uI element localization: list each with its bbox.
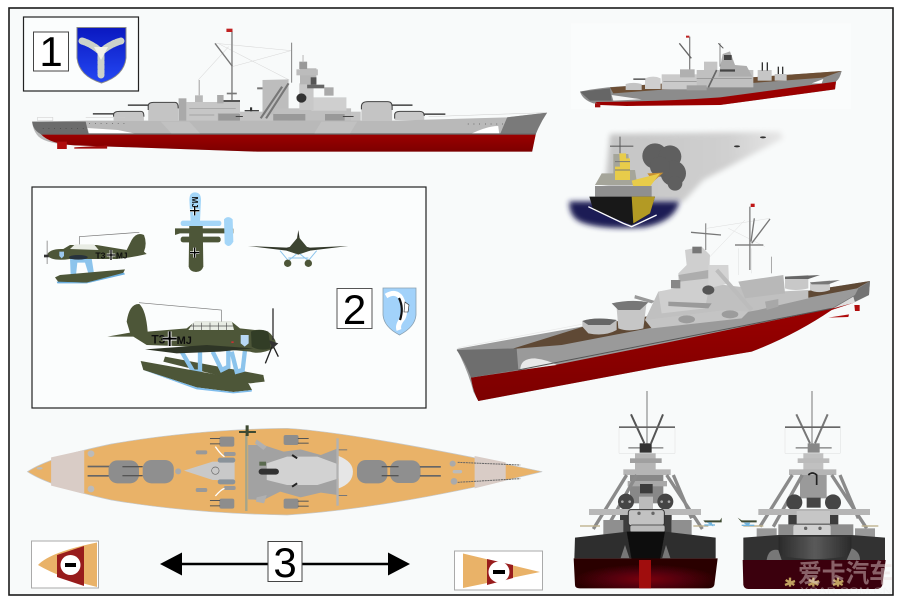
masts and flag (691, 204, 772, 273)
hull above water (743, 535, 885, 560)
watermark: 爱卡汽车 (798, 560, 893, 588)
icon: small aircraft beside front view (703, 518, 722, 527)
bridge tower (623, 453, 671, 510)
aircraft top view (175, 192, 233, 272)
superstructure and turrets (626, 51, 787, 90)
anchor gear (450, 461, 520, 485)
aircraft large three-quarter view: MJ (177, 335, 192, 347)
rear turret (757, 511, 875, 539)
deck planking (27, 428, 542, 515)
rigging (707, 218, 770, 275)
masts (679, 36, 723, 72)
hull below water (743, 560, 886, 589)
superstructure (645, 247, 840, 328)
number 3: 3 (273, 539, 297, 586)
gun smoke cloud (642, 143, 686, 191)
main superstructure (248, 435, 353, 509)
aircraft top view: MJ (190, 197, 199, 208)
panel: bow-on front view (574, 391, 718, 588)
bridge tower (789, 453, 836, 508)
splayed supports (760, 475, 867, 528)
panel: perspective view of ship, top right (571, 23, 851, 109)
funnel and catapult crane (245, 43, 292, 118)
panel: side elevation of battleship (32, 29, 547, 152)
number 1: 1 (39, 28, 63, 75)
panel: large perspective view of ship (457, 204, 870, 401)
smoke trail (603, 132, 783, 202)
number 2: 2 (343, 286, 366, 333)
hull (580, 71, 842, 107)
side guns (743, 494, 878, 527)
panel: stern marking inset (32, 541, 98, 588)
forward main turrets (357, 460, 441, 483)
main gun turrets (93, 102, 445, 121)
main mast and flag (215, 29, 240, 105)
forward turrets (582, 295, 655, 334)
hull above water (574, 532, 716, 560)
watermark: XCAR.COM.CN (800, 586, 892, 596)
illustration: ship firing guns at aircraft (569, 132, 783, 228)
secondary turrets (219, 114, 354, 121)
firing ship (588, 137, 660, 227)
number 2 (337, 286, 372, 333)
aircraft side view small: MJ (116, 250, 128, 260)
forward turret front (580, 510, 708, 537)
aircraft side view small: T3 (95, 250, 106, 260)
side guns (589, 494, 701, 515)
aft superstructure (179, 80, 361, 122)
splayed supports (593, 475, 702, 529)
white disc aerial marking (60, 555, 80, 575)
bridge tower (274, 55, 351, 122)
white disc aerial marking (488, 562, 510, 582)
hull (32, 113, 547, 152)
sea (569, 201, 679, 228)
panel: stern-on rear view (743, 391, 886, 589)
distant aircraft (734, 136, 766, 147)
hull (457, 281, 870, 401)
aft superstructure (184, 437, 236, 509)
panel: deck plan (27, 425, 542, 515)
icon: small aircraft beside rear view (738, 518, 757, 527)
mast (619, 391, 675, 453)
arrow: double-headed length arrow with number 3 (160, 539, 410, 586)
hull below water (574, 558, 718, 588)
rigging (198, 43, 291, 80)
icon: blue seahorse shield (383, 288, 416, 335)
propellers (785, 578, 843, 587)
panel: bow marking inset (454, 551, 542, 590)
mast (785, 391, 840, 453)
aircraft side view small (44, 232, 147, 283)
panel: emblem box 1 (24, 17, 138, 91)
panel: aircraft box 2 (32, 187, 426, 408)
aircraft front view (248, 230, 348, 267)
catapult and aircraft (239, 425, 256, 511)
aircraft large three-quarter view: T3 (151, 332, 166, 346)
icon: blue shield with oak leaves (77, 28, 126, 83)
number 3 (268, 539, 302, 586)
aircraft large three-quarter view (107, 303, 278, 393)
rear main turrets (88, 450, 181, 492)
